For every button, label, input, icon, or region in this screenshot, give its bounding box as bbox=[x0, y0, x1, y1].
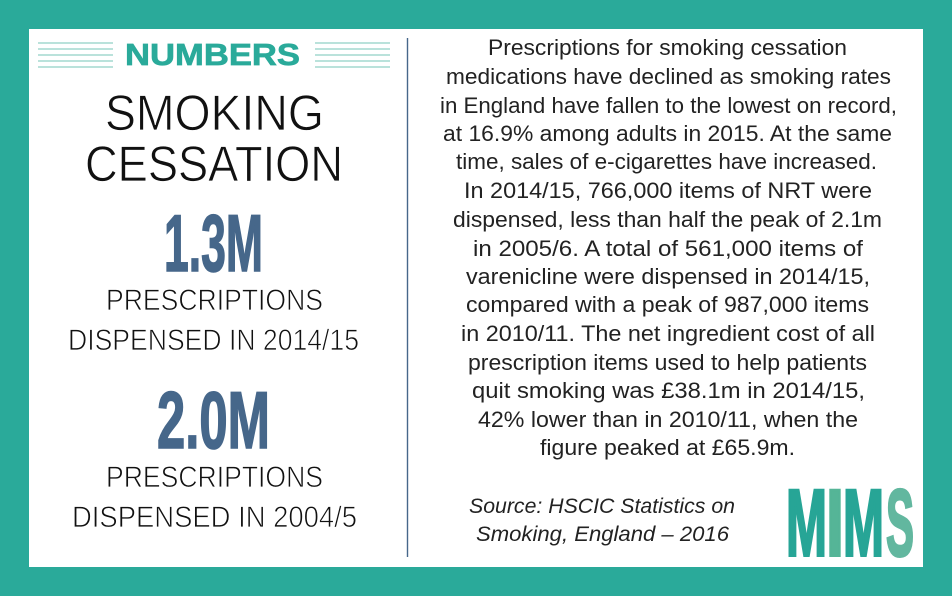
text block: body paragraph: In 2014/15, 766,000 items of NRT were bbox=[464, 178, 872, 203]
text block: body paragraph: quit smoking was £38.1m in 2014/15, bbox=[472, 378, 865, 403]
stat: 2.0M prescriptions bbox=[72, 376, 357, 534]
stat: 1.3M prescriptions: PRESCRIPTIONS bbox=[106, 284, 323, 317]
text block: body paragraph: prescription items used to help patients bbox=[468, 350, 867, 375]
text block: body paragraph: in 2010/11. The net ingredient cost of all bbox=[461, 321, 875, 346]
text block: body paragraph: dispensed, less than half the peak of 2.1m bbox=[453, 207, 882, 232]
logo: MIMS bbox=[786, 470, 914, 576]
text block: source: Smoking, England – 2016 bbox=[476, 522, 729, 546]
logo: MIMS: M bbox=[843, 470, 884, 576]
text block: body paragraph: varenicline were dispensed in 2014/15, bbox=[466, 264, 870, 289]
title: smoking cessation: SMOKING bbox=[105, 85, 324, 141]
stat: 2.0M prescriptions: PRESCRIPTIONS bbox=[106, 461, 323, 494]
stat: 2.0M prescriptions: DISPENSED IN 2004/5 bbox=[72, 501, 357, 534]
text block: body paragraph: time, sales of e-cigarettes have increased. bbox=[456, 149, 877, 174]
text block: body paragraph: compared with a peak of 987,000 items bbox=[466, 292, 869, 317]
stat: 2.0M prescriptions: 2.0M bbox=[157, 376, 270, 466]
text block: source bbox=[469, 494, 735, 546]
panel: white content card: S bbox=[886, 470, 914, 576]
text block: body paragraph: Prescriptions for smoking cessation bbox=[488, 35, 847, 60]
logo: MIMS: I bbox=[826, 470, 844, 576]
text block: body paragraph: in 2005/6. A total of 561,000 items of bbox=[473, 236, 864, 261]
text block: body paragraph: at 16.9% among adults in 2015. At the same bbox=[443, 121, 892, 146]
title: smoking cessation bbox=[85, 85, 343, 192]
text block: source: Source: HSCIC Statistics on bbox=[469, 494, 735, 518]
text block: body paragraph: in England have fallen to the lowest on record, bbox=[440, 93, 897, 118]
stat: 1.3M prescriptions: 1.3M bbox=[164, 199, 263, 289]
text block: body paragraph bbox=[440, 35, 897, 460]
heading: numbers with stripes: NUMBERS bbox=[125, 38, 300, 72]
text block: body paragraph: 42% lower than in 2010/11, when the bbox=[478, 407, 858, 432]
stat: 1.3M prescriptions: DISPENSED IN 2014/15 bbox=[68, 324, 359, 357]
text block: body paragraph: figure peaked at £65.9m. bbox=[540, 435, 795, 460]
title: smoking cessation: CESSATION bbox=[85, 136, 343, 192]
stat: 1.3M prescriptions bbox=[68, 199, 359, 357]
text block: body paragraph: medications have declined as smoking rates bbox=[446, 64, 891, 89]
logo: MIMS: M bbox=[786, 470, 827, 576]
